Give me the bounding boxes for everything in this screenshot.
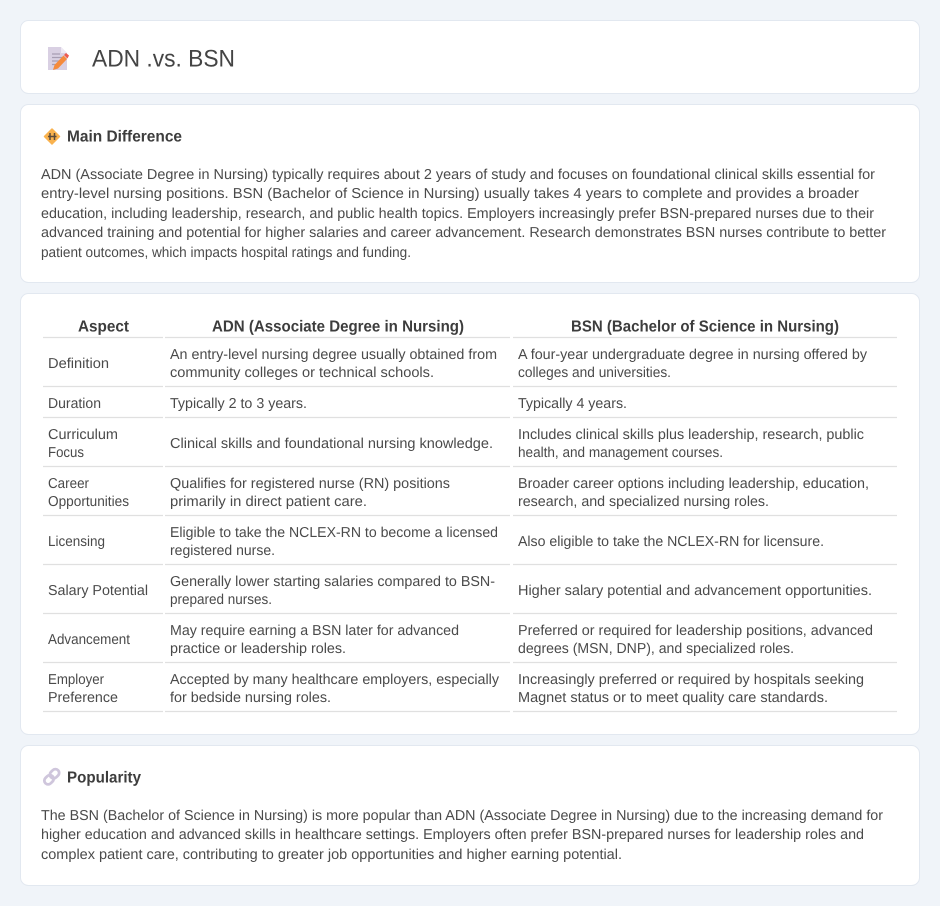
table row: employer preference: Magnet status or to meet quality care standards.: [518, 690, 828, 706]
table row: advancement: Advancement: [48, 632, 130, 648]
title: ADN .vs. BSN: [92, 46, 235, 72]
text block: popularity: higher education and advanced skills in healthcare settings. Employers often prefer BSN-prepared nurses for leadership roles and: [41, 827, 864, 843]
table row: curriculum focus: [48, 427, 864, 461]
icon: document with pencil: [48, 47, 69, 70]
table row: salary potential: Salary Potential: [48, 583, 148, 599]
panel: comparison table: [20, 294, 920, 734]
table row: employer preference: [48, 672, 864, 706]
text block: main difference: advanced training and potential for higher salaries and career advancement. Research demonstrates BSN nurses contribute to better: [41, 225, 886, 241]
table row: definition: community colleges or technical schools.: [170, 365, 434, 381]
table header row: Aspect: [78, 318, 130, 336]
table row: definition: An entry-level nursing degree usually obtained from: [170, 347, 497, 363]
table row: duration: [48, 396, 627, 412]
table row: curriculum focus: Includes clinical skills plus leadership, research, public: [518, 427, 864, 443]
table row: duration: Typically 4 years.: [518, 396, 627, 412]
table row: advancement: practice or leadership roles.: [170, 641, 346, 657]
table row: duration: Typically 2 to 3 years.: [170, 396, 307, 412]
table row: career opportunities: research, and specialized nursing roles.: [518, 494, 769, 510]
panel: popularity: [20, 746, 920, 886]
table row: licensing: registered nurse.: [170, 543, 275, 559]
table row: advancement: May require earning a BSN later for advanced: [170, 623, 459, 639]
table row: salary potential: Higher salary potential and advancement opportunities.: [518, 583, 872, 599]
table row: advancement: [48, 623, 873, 657]
table row: employer preference: Increasingly preferred or required by hospitals seeking: [518, 672, 864, 688]
icon: chain link: [43, 768, 61, 786]
heading: main difference: Main Difference: [67, 128, 182, 146]
table row: employer preference: Employer: [48, 672, 104, 688]
table header row: ADN (Associate Degree in Nursing): [212, 318, 464, 336]
table row: curriculum focus: Focus: [48, 445, 84, 461]
panel: main difference: [20, 104, 920, 282]
table header row: BSN (Bachelor of Science in Nursing): [571, 318, 839, 336]
table row: licensing: Also eligible to take the NCLEX-RN for licensure.: [518, 534, 824, 550]
table row: salary potential: prepared nurses.: [170, 592, 272, 608]
table row: definition: colleges and universities.: [518, 365, 671, 381]
text block: popularity: complex patient care, contributing to greater job opportunities and higher earning potential.: [41, 847, 622, 863]
table row: licensing: Licensing: [48, 534, 105, 550]
table row: advancement: Preferred or required for leadership positions, advanced: [518, 623, 873, 639]
table row: career opportunities: primarily in direct patient care.: [170, 494, 367, 510]
panel: title header: [20, 20, 920, 94]
table row: employer preference: Accepted by many healthcare employers, especially: [170, 672, 500, 688]
table row: career opportunities: Qualifies for registered nurse (RN) positions: [170, 476, 450, 492]
table row: employer preference: Preference: [48, 690, 118, 706]
table row: career opportunities: Career: [48, 476, 89, 492]
table row: career opportunities: [48, 476, 869, 510]
table header row: [78, 318, 839, 336]
heading: popularity: Popularity: [67, 770, 141, 786]
text block: main difference: entry-level nursing positions. BSN (Bachelor of Science in Nursing) usually takes 4 years to complete and provides a broader: [41, 186, 859, 202]
text block: main difference: [41, 167, 886, 261]
text block: main difference: patient outcomes, which impacts hospital ratings and funding.: [41, 245, 411, 261]
table row: licensing: Eligible to take the NCLEX-RN to become a licensed: [170, 525, 498, 541]
table row: curriculum focus: Curriculum: [48, 427, 118, 443]
text block: popularity: The BSN (Bachelor of Science in Nursing) is more popular than ADN (Associate Degree in Nursing) due to the increasing demand for: [41, 808, 883, 824]
table row: career opportunities: Opportunities: [48, 494, 129, 510]
table row: salary potential: Generally lower starting salaries compared to BSN-: [170, 574, 495, 590]
text block: popularity: [41, 808, 883, 863]
icon: warning diamond: [44, 129, 60, 144]
table row: career opportunities: Broader career options including leadership, education,: [518, 476, 869, 492]
text block: main difference: ADN (Associate Degree in Nursing) typically requires about 2 years of study and focuses on foundational clinical skills essential for: [41, 167, 875, 183]
table row: licensing: [48, 525, 824, 559]
table row: definition: A four-year undergraduate degree in nursing offered by: [518, 347, 868, 363]
table row: employer preference: for bedside nursing roles.: [170, 690, 331, 706]
table row: definition: [48, 347, 868, 381]
table row: advancement: degrees (MSN, DNP), and specialized roles.: [518, 641, 794, 657]
table row: duration: Duration: [48, 396, 101, 412]
table row: definition: Definition: [48, 356, 109, 372]
table row: curriculum focus: health, and management courses.: [518, 445, 723, 461]
table row: curriculum focus: Clinical skills and foundational nursing knowledge.: [170, 436, 493, 452]
text block: main difference: education, including leadership, research, and public health topics. Employers increasingly prefer BSN-prepared nurses due to their: [41, 206, 874, 222]
table row: salary potential: [48, 574, 872, 608]
